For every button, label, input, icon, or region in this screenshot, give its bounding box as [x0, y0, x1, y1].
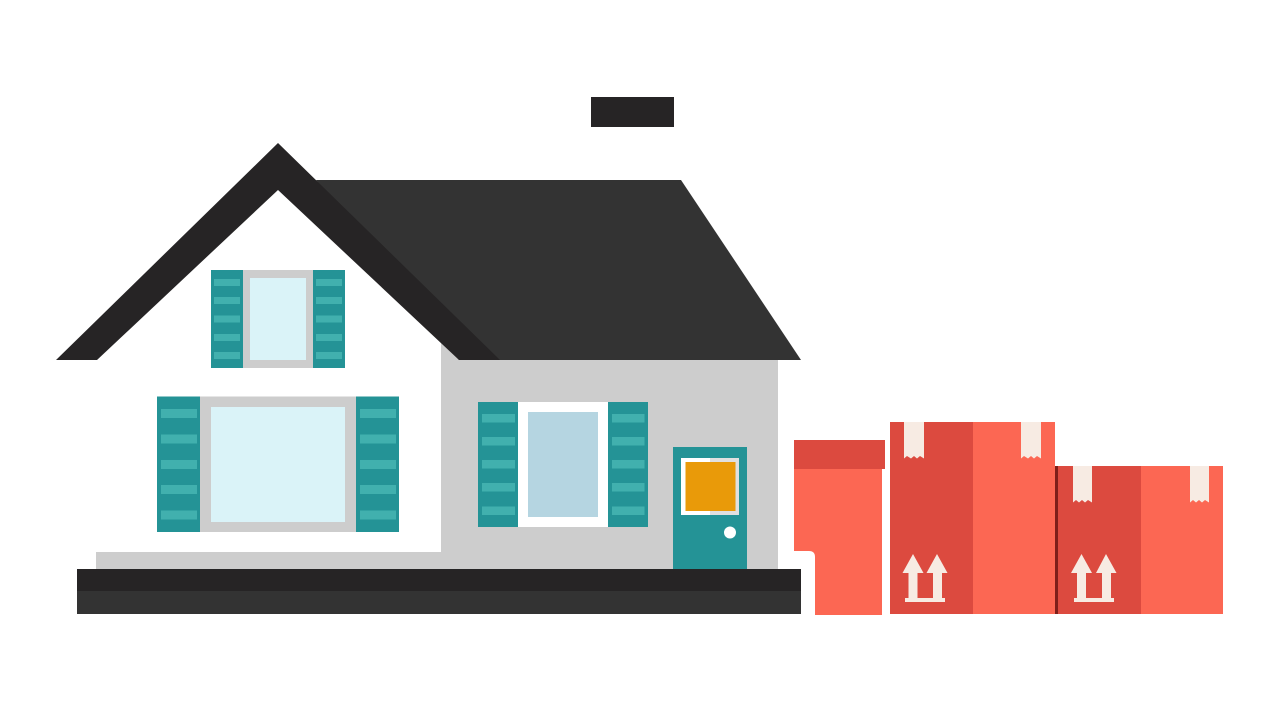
- tape: middle box right: [1021, 422, 1041, 458]
- shutter: side left: [478, 402, 518, 527]
- white cutout around ground slab: [790, 551, 815, 615]
- box: middle tall box: [890, 422, 1055, 614]
- house: [56, 143, 801, 614]
- tape: right box left: [1073, 466, 1092, 502]
- shutter: side right: [608, 402, 648, 527]
- window: large lower left: [157, 396, 399, 532]
- ground slab: [77, 569, 801, 614]
- box: right box: [1055, 466, 1223, 614]
- side wall: [441, 343, 778, 570]
- shutter: upper right: [313, 270, 345, 368]
- shutter: large left: [157, 396, 200, 532]
- icon: this side up arrows, right box: [1071, 554, 1116, 602]
- box: left box with lid: [794, 440, 885, 615]
- gable roof trim: [56, 143, 500, 360]
- chimney: [591, 97, 674, 127]
- door: [673, 447, 747, 569]
- foundation ledge: [96, 552, 441, 570]
- shutter: upper left: [211, 270, 243, 368]
- tape: right box right: [1190, 466, 1209, 502]
- icon: this side up arrows, middle box: [902, 554, 948, 602]
- tape: middle box left: [904, 422, 924, 458]
- shutter: large right: [356, 396, 399, 532]
- main roof: [316, 180, 801, 360]
- window: upper gable: [211, 270, 345, 368]
- window: side wall: [478, 402, 648, 527]
